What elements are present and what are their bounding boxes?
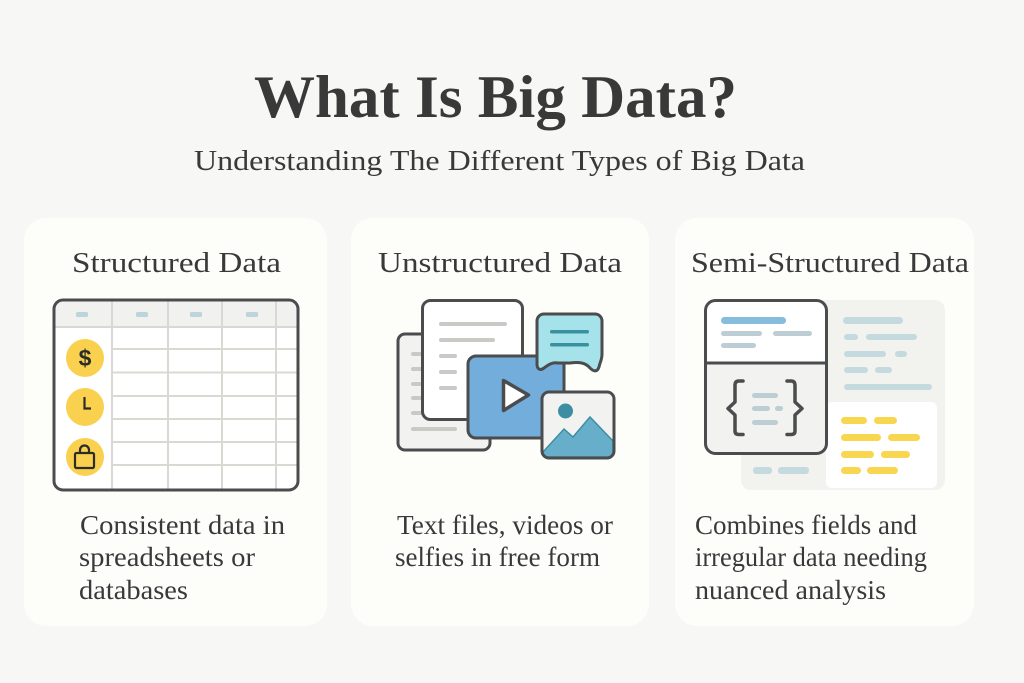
description: semi-structured data: nuanced analysis: [695, 575, 886, 605]
back document: [398, 334, 490, 450]
heading: semi-structured data: Semi-Structured Data: [691, 247, 969, 279]
chat bubble: [537, 314, 602, 371]
background sheet: [741, 300, 945, 490]
icon: dollar coin: $: [79, 345, 92, 371]
image thumbnail: [542, 392, 614, 458]
spreadsheet icon: [54, 300, 298, 490]
description: structured data: Consistent data in: [80, 510, 286, 540]
subtitle: Understanding The Different Types of Big Data: [194, 145, 805, 177]
record card: [706, 300, 826, 454]
icon: curly braces: [728, 381, 802, 434]
description: structured data: spreadsheets or: [79, 542, 255, 572]
description: semi-structured data: Combines fields and: [695, 510, 917, 540]
icon: dollar coin: [66, 339, 104, 377]
video player: [468, 356, 564, 438]
yellow field block: [826, 402, 937, 488]
description: unstructured data: selfies in free form: [395, 542, 600, 572]
description: structured data: databases: [79, 575, 188, 605]
description: structured data: [79, 510, 286, 605]
icon: bag: [66, 438, 104, 476]
semi-structured document icon: [706, 300, 945, 490]
heading: structured data: Structured Data: [72, 247, 281, 279]
description: unstructured data: Text files, videos or: [397, 510, 613, 540]
panel: unstructured data: [351, 218, 649, 626]
front document: [422, 300, 522, 420]
description: unstructured data: [395, 510, 613, 572]
title: What Is Big Data?: [254, 64, 737, 130]
description: semi-structured data: [695, 510, 927, 605]
heading: unstructured data: Unstructured Data: [378, 247, 622, 279]
panel: semi-structured data: [675, 218, 974, 626]
panel: structured data: [24, 218, 327, 626]
icon: clock letter: [66, 388, 104, 426]
media collage icon: [398, 300, 614, 458]
description: semi-structured data: irregular data needing: [695, 542, 927, 572]
